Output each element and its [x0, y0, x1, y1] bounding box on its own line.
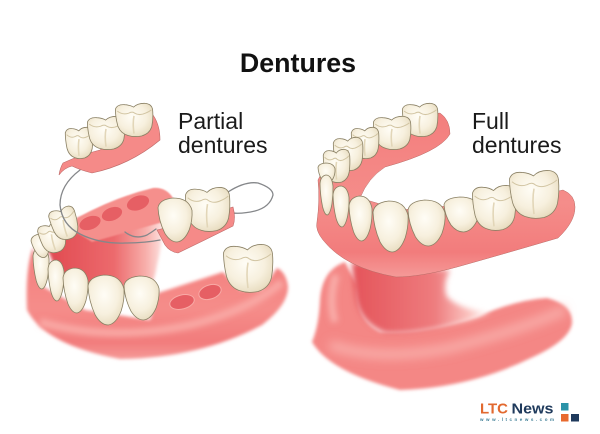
label: partial dentures: [178, 108, 268, 158]
label: full dentures: Full: [472, 108, 509, 134]
empty sockets lower: [168, 282, 223, 312]
illustration: partial dentures lower arch: [27, 190, 288, 359]
palate bar with sockets: [76, 188, 173, 242]
label: full dentures: dentures: [472, 132, 562, 158]
lower teeth: [33, 244, 273, 325]
label: full dentures: [472, 108, 562, 158]
logo: LTC News: News: [512, 400, 554, 418]
logo squares: [561, 403, 579, 422]
left lower back teeth: [30, 205, 81, 259]
logo: LTC News: www.ltcnews.com: [479, 417, 554, 422]
metal clasp wires: [60, 170, 273, 243]
gum: [317, 113, 575, 277]
partial denture upper piece: [59, 103, 160, 175]
label: partial dentures: dentures: [178, 132, 268, 158]
label: partial dentures: Partial: [178, 108, 243, 134]
logo: LTC News: [479, 400, 579, 422]
illustration: full dentures upper arch: [317, 103, 575, 277]
logo: LTC News: LTC: [480, 400, 508, 418]
partial denture bridge piece: [157, 187, 234, 253]
teeth: [318, 103, 559, 252]
title: Dentures: [240, 48, 356, 78]
palate floor: [44, 190, 172, 292]
illustration: full dentures lower base: [312, 262, 572, 390]
gum base: [27, 247, 288, 359]
